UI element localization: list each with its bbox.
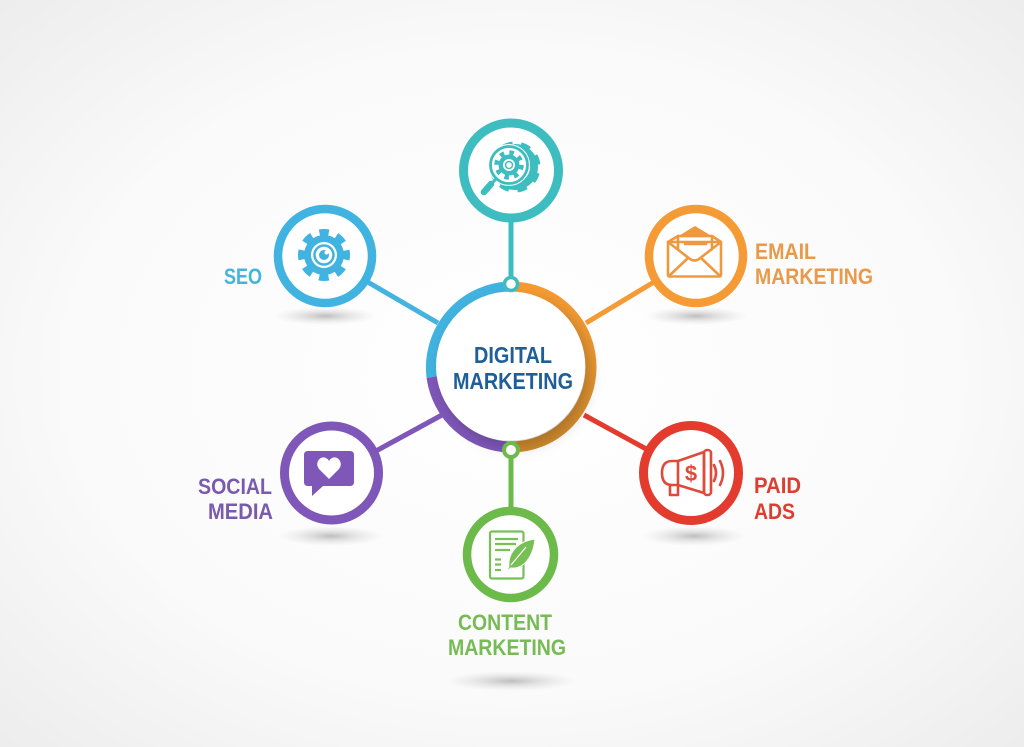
- ring: [464, 123, 558, 218]
- hub ring: SEO segment: [431, 287, 511, 377]
- ring: [649, 209, 743, 303]
- node: social media: [198, 426, 378, 524]
- label: [754, 473, 801, 524]
- node: content marketing: [448, 511, 566, 660]
- icon: megaphone: $: [685, 461, 697, 486]
- label: [448, 610, 566, 660]
- bottom node: [504, 443, 518, 457]
- ground shadows: [273, 307, 748, 691]
- label: MARKETING: [755, 264, 873, 289]
- hub title: DIGITAL: [474, 342, 552, 368]
- node: email marketing: [649, 209, 873, 303]
- hub disc: [436, 292, 585, 440]
- label: ADS: [754, 499, 795, 524]
- ring: [644, 426, 738, 520]
- hub ring: orange segment: [511, 287, 591, 447]
- central hub: [431, 278, 591, 457]
- node: paid ads: [644, 426, 801, 524]
- label: [198, 474, 273, 524]
- icon: megaphone: [662, 450, 723, 495]
- label: SOCIAL: [198, 474, 272, 499]
- ring: [278, 209, 372, 303]
- node: SEO: [224, 209, 372, 303]
- label: [755, 239, 873, 289]
- connector lines: [366, 220, 654, 510]
- icon: open envelope: [668, 228, 721, 276]
- node: analytics (top): [464, 123, 558, 218]
- ring: [467, 511, 554, 598]
- hub title: MARKETING: [453, 368, 573, 394]
- label: SEO: [224, 264, 262, 289]
- icon: document with quill: [490, 532, 535, 578]
- label: PAID: [754, 473, 801, 498]
- hub title: [453, 342, 573, 394]
- ring: [284, 426, 378, 520]
- icon: speech bubble with heart: [304, 451, 354, 496]
- label: MEDIA: [208, 499, 273, 524]
- label: CONTENT: [458, 610, 552, 635]
- icon: magnifier and gears: [484, 139, 543, 195]
- label: EMAIL: [755, 239, 816, 264]
- label: MARKETING: [448, 635, 566, 660]
- hub ring: purple segment: [432, 377, 511, 447]
- top node: [504, 278, 518, 290]
- icon: gear: [302, 232, 346, 278]
